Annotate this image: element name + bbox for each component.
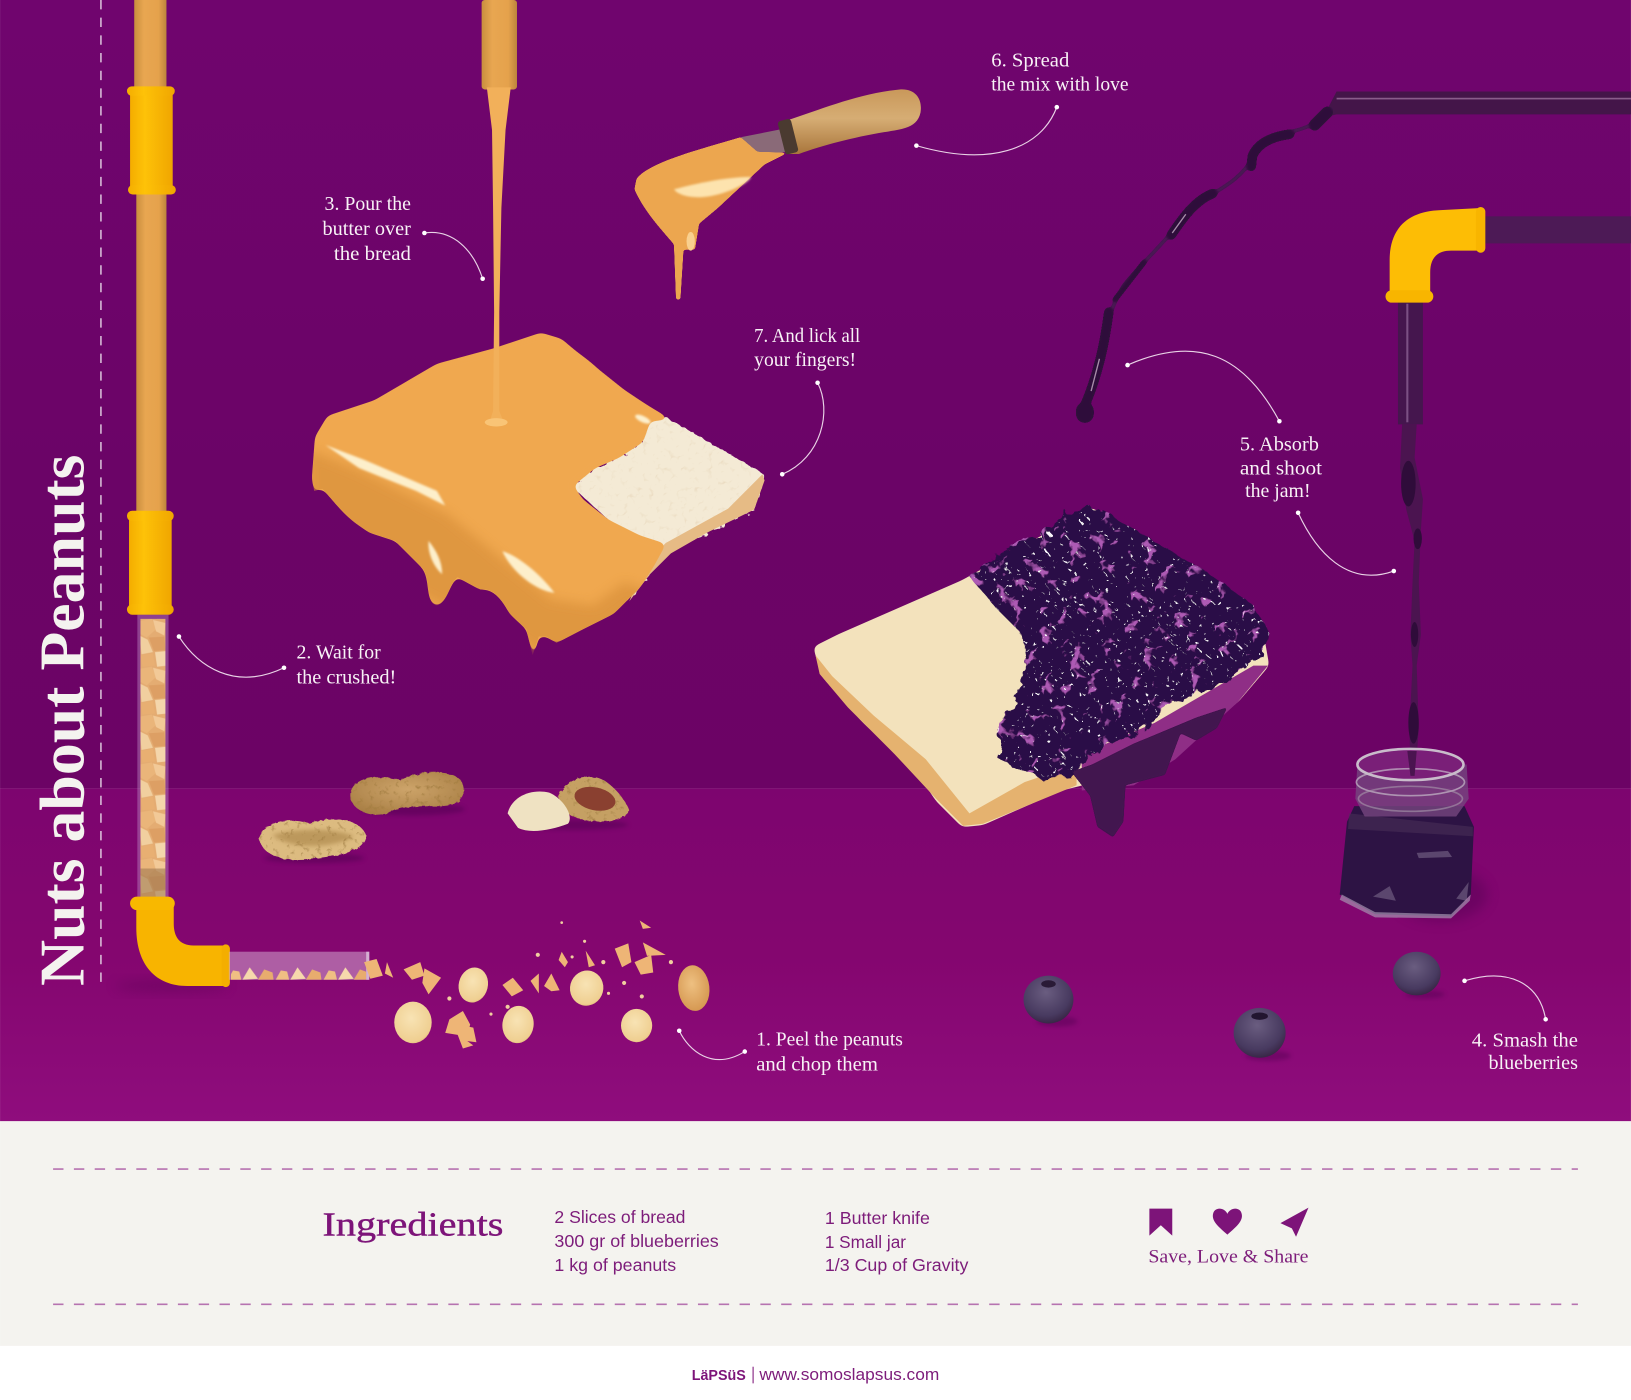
- step 6 callout: 6. Spread: [991, 50, 1069, 72]
- step 7 callout: your fingers!: [754, 349, 856, 371]
- blueberry 2: [1234, 1008, 1291, 1061]
- footer: [0, 1346, 1631, 1400]
- step 6 callout: [914, 50, 1129, 155]
- glossy highlights: [326, 413, 652, 593]
- peanut butter tube with crushed peanuts: [114, 0, 369, 992]
- bread with peanut butter: [308, 333, 765, 666]
- whole peanut: [350, 772, 465, 815]
- wooden handle: [786, 89, 921, 154]
- step 2 callout: the crushed!: [296, 666, 396, 688]
- peanuts in shells: [259, 772, 629, 863]
- pouring peanut butter tube and stream: [482, 0, 517, 426]
- step 2 callout: [177, 634, 396, 688]
- logo: LäPSüS: [692, 1368, 746, 1384]
- ingredient list column 2: [825, 1208, 969, 1275]
- step 4 callout: blueberries: [1488, 1052, 1578, 1074]
- horizontal jam tube: [1323, 92, 1631, 118]
- jam tube and airborne jam: [1084, 92, 1631, 414]
- peeled peanuts and chopped pieces: [364, 921, 712, 1048]
- ingredient list column 2: 1/3 Cup of Gravity: [825, 1255, 969, 1275]
- ingredients panel: [0, 1121, 1631, 1346]
- step 5 callout: and shoot: [1240, 457, 1322, 479]
- step 3 callout: the bread: [334, 243, 411, 265]
- jar neck: [1355, 764, 1469, 816]
- peeled kernels: [394, 964, 652, 1045]
- knife with peanut butter: [635, 89, 921, 300]
- step 3 callout: 3. Pour the: [325, 193, 411, 215]
- bread with blueberry jam: [813, 505, 1269, 837]
- step 6 callout: the mix with love: [991, 73, 1129, 95]
- bread slice: [813, 508, 1269, 827]
- step 5 callout: 5. Absorb: [1240, 433, 1319, 455]
- step 5 callout: the jam!: [1245, 480, 1311, 502]
- yellow elbow: [114, 897, 230, 992]
- peanut butter layer: [312, 333, 671, 657]
- empty shell: [259, 819, 366, 863]
- step 5 callout: [1125, 351, 1396, 575]
- upper butter column: [134, 0, 166, 94]
- ingredients heading: Ingredients: [322, 1206, 503, 1244]
- step 1 callout: [677, 1028, 903, 1075]
- ingredient list column 2: 1 Butter knife: [825, 1208, 930, 1228]
- lower yellow sleeve: [127, 511, 174, 615]
- step 1 callout: and chop them: [756, 1053, 878, 1075]
- upper yellow sleeve: [127, 86, 176, 195]
- step 7 callout: 7. And lick all: [754, 325, 861, 347]
- step 3 callout: butter over: [322, 218, 411, 240]
- step 3 callout: [322, 193, 485, 281]
- jar body: [1340, 806, 1474, 916]
- icon: heart: [1213, 1209, 1242, 1235]
- ingredient list column 1: 2 Slices of bread: [554, 1207, 685, 1227]
- vertical tube: [1398, 302, 1423, 424]
- jam jar: [1340, 749, 1487, 922]
- horizontal glass tube: [229, 952, 369, 980]
- share caption: Save, Love & Share: [1148, 1247, 1309, 1268]
- icon: bookmark: [1149, 1209, 1172, 1236]
- jam layer: [970, 505, 1267, 778]
- icon: paper plane: [1280, 1208, 1309, 1237]
- yellow elbow dropper with jam: [1385, 207, 1631, 772]
- yellow elbow: [1385, 207, 1485, 303]
- blueberries: [1024, 952, 1445, 1061]
- glass tube with crushed peanuts: [137, 615, 169, 900]
- ingredient list column 2: 1 Small jar: [825, 1232, 906, 1252]
- ingredient list column 1: [554, 1207, 719, 1275]
- blueberry 1: [1024, 976, 1078, 1027]
- step 2 callout: 2. Wait for: [296, 641, 381, 663]
- horizontal tube: [1485, 216, 1631, 243]
- butter on knife: [635, 137, 787, 300]
- peanut butter side shading: [312, 452, 640, 655]
- title: Nuts about Peanuts: [26, 455, 97, 986]
- step 1 callout: 1. Peel the peanuts: [756, 1028, 903, 1050]
- exposed bread slice: [572, 417, 765, 603]
- website: www.somoslapsus.com: [758, 1365, 939, 1384]
- jam smear: [1082, 666, 1268, 790]
- step 7 callout: [754, 325, 861, 477]
- chopped pieces: [364, 921, 666, 1048]
- blueberry 3: [1393, 952, 1445, 999]
- ingredient list column 1: 300 gr of blueberries: [554, 1231, 719, 1251]
- step 4 callout: 4. Smash the: [1472, 1029, 1578, 1051]
- jam stream: [1084, 109, 1331, 414]
- ingredient list column 1: 1 kg of peanuts: [554, 1255, 676, 1275]
- jam falling into jar: [1400, 424, 1423, 772]
- step 4 callout: [1462, 976, 1578, 1074]
- open shell with red nut: [508, 776, 629, 831]
- jam drips: [1071, 707, 1227, 837]
- knife blade: [741, 129, 788, 154]
